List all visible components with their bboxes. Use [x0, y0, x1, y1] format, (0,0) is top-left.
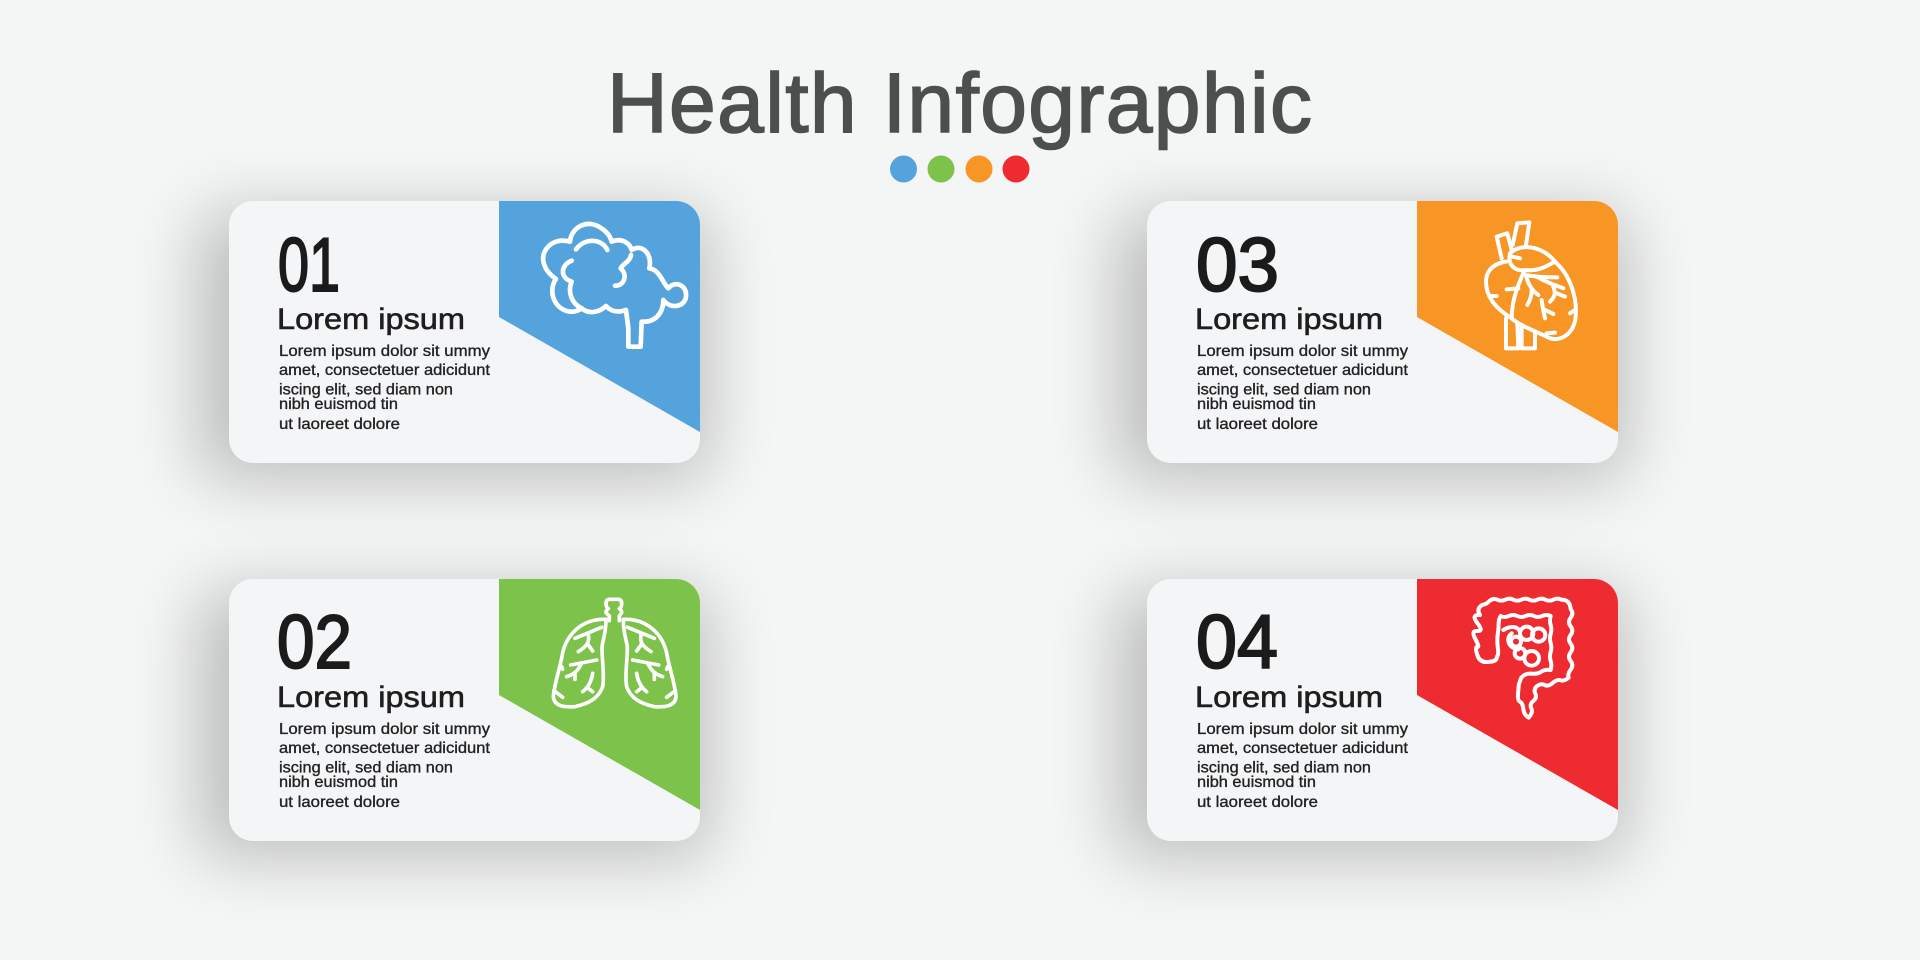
body text: iscing elit, sed diam non [1197, 760, 1371, 776]
colour block: orange [1417, 201, 1618, 432]
body text: nibh euismod tin [279, 396, 398, 413]
body text [1197, 721, 1409, 811]
icon: brain [543, 224, 686, 347]
body text [279, 343, 491, 433]
number 04: 04 [1196, 600, 1278, 685]
body text: amet, consectetuer adicidunt [279, 362, 491, 379]
heading: Lorem ipsum [1195, 303, 1383, 336]
body text: iscing elit, sed diam non [1197, 382, 1371, 398]
body text: nibh euismod tin [1197, 774, 1316, 791]
panel: card 03 heart [1116, 201, 1628, 480]
icon: intestine [1473, 599, 1572, 718]
panel: card 02 lungs [198, 579, 710, 858]
colour block: blue [499, 201, 700, 432]
heading: Lorem ipsum [277, 303, 465, 336]
body text: ut laoreet dolore [1197, 416, 1318, 433]
number 02: 02 [277, 600, 352, 685]
number 03: 03 [1196, 223, 1279, 308]
body text: Lorem ipsum dolor sit ummy [279, 343, 490, 360]
title: Health Infographic [607, 56, 1312, 150]
body text: nibh euismod tin [1197, 396, 1316, 413]
body text: amet, consectetuer adicidunt [279, 740, 491, 757]
body text: Lorem ipsum dolor sit ummy [279, 721, 490, 738]
body text: amet, consectetuer adicidunt [1197, 362, 1409, 379]
heading: Lorem ipsum [1195, 681, 1383, 714]
body text [279, 721, 491, 811]
body text: Lorem ipsum dolor sit ummy [1197, 721, 1408, 738]
panel: card 04 intestine [1116, 579, 1628, 858]
body text: amet, consectetuer adicidunt [1197, 740, 1409, 757]
body text: nibh euismod tin [279, 774, 398, 791]
body text: ut laoreet dolore [279, 416, 400, 433]
panel: card 01 brain [198, 201, 710, 480]
colour block: red [1417, 579, 1618, 810]
colour dots [890, 156, 1030, 182]
body text: iscing elit, sed diam non [279, 382, 453, 398]
body text: ut laoreet dolore [279, 794, 400, 811]
body text: iscing elit, sed diam non [279, 760, 453, 776]
icon: heart [1486, 222, 1576, 348]
colour block: green [499, 579, 700, 810]
icon: lungs [553, 599, 676, 707]
heading: Lorem ipsum [277, 681, 465, 714]
body text: ut laoreet dolore [1197, 794, 1318, 811]
number 01: 01 [278, 223, 340, 308]
body text: Lorem ipsum dolor sit ummy [1197, 343, 1408, 360]
body text [1197, 343, 1409, 433]
